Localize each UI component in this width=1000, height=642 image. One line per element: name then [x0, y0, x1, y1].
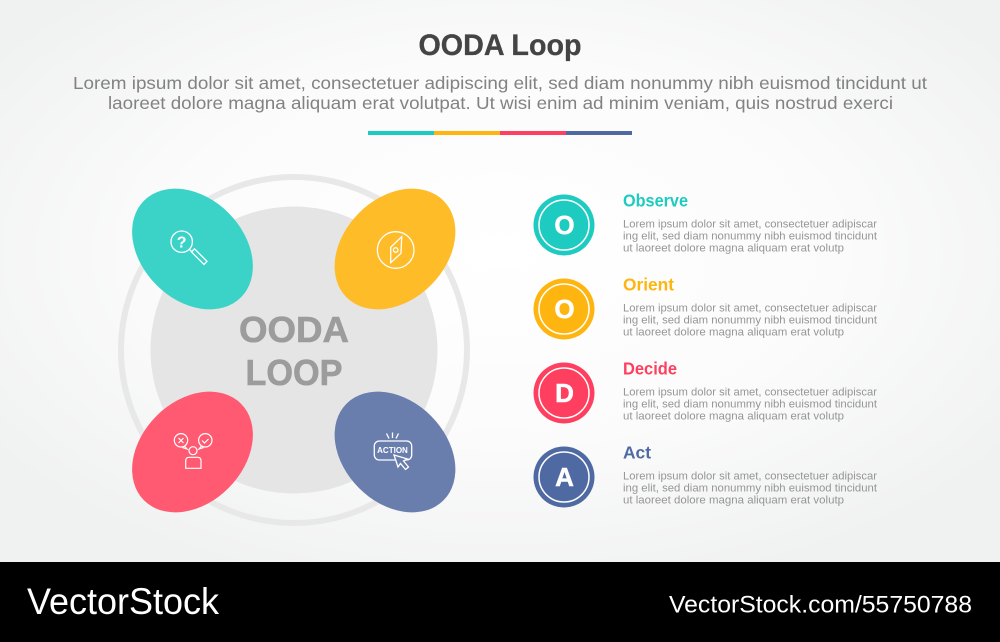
cycle diagram [108, 165, 479, 536]
petal: observe [108, 165, 277, 333]
badge O: O [554, 210, 575, 240]
body text: ut laoreet dolore magna aliquam erat volutp [623, 410, 844, 422]
body text [623, 386, 877, 422]
badge D: D [555, 378, 574, 408]
icon: magnifying glass with question mark: ? [177, 234, 187, 252]
petal: orient [311, 165, 479, 333]
body text: Lorem ipsum dolor sit amet, consectetuer adipiscar [623, 302, 877, 314]
body text [623, 470, 877, 506]
body text: ing elit, sed diam nonummy nibh euismod tincidunt [623, 482, 877, 494]
colour divider bar [368, 131, 632, 135]
centre label: OODA [239, 309, 349, 350]
body text: ing elit, sed diam nonummy nibh euismod tincidunt [623, 398, 877, 410]
outer ring [121, 177, 467, 523]
badge D [534, 362, 594, 424]
title: OODA Loop [418, 29, 582, 62]
centre label: LOOP [246, 352, 342, 393]
list item: act [534, 442, 877, 508]
heading: Act [623, 442, 651, 462]
body text: ing elit, sed diam nonummy nibh euismod tincidunt [623, 314, 877, 326]
badge O [534, 194, 594, 256]
icon: action button with cursor: ACTION [377, 446, 408, 455]
list item: orient [534, 274, 877, 340]
list item: decide [534, 358, 877, 424]
body text: ut laoreet dolore magna aliquam erat volutp [623, 494, 844, 506]
footer logo: VectorStock [27, 581, 219, 622]
heading: Decide [623, 358, 677, 378]
badge A [534, 446, 594, 508]
centre label [239, 309, 349, 393]
icon: magnifying glass with question mark [171, 231, 207, 264]
body text: ut laoreet dolore magna aliquam erat volutp [623, 326, 844, 338]
body text [623, 218, 877, 254]
heading: Orient [623, 274, 674, 294]
heading: Observe [623, 190, 688, 210]
icon: compass [377, 232, 414, 268]
petal: decide [108, 368, 277, 536]
body text: ing elit, sed diam nonummy nibh euismod tincidunt [623, 230, 877, 242]
subtitle text block: Lorem ipsum dolor sit amet, consectetuer adipiscing elit, sed diam nonummy nibh euismod tincidunt ut [73, 73, 927, 93]
body text: Lorem ipsum dolor sit amet, consectetuer adipiscar [623, 386, 877, 398]
badge O [534, 278, 594, 340]
badge A: A [555, 462, 574, 492]
footer band [0, 562, 1000, 642]
subtitle text block: laoreet dolore magna aliquam erat volutpat. Ut wisi enim ad minim veniam, quis nostrud exerci [108, 93, 893, 113]
petal: act [311, 368, 479, 536]
body text [623, 302, 877, 338]
subtitle text block [73, 73, 927, 113]
centre disc [150, 206, 438, 494]
icon: person choosing [174, 434, 212, 468]
list item: observe [534, 190, 877, 256]
body text: Lorem ipsum dolor sit amet, consectetuer adipiscar [623, 218, 877, 230]
badge O: O [554, 294, 575, 324]
icon: action button with cursor [374, 432, 412, 470]
footer image id: VectorStock.com/55750788 [669, 592, 972, 618]
body text: Lorem ipsum dolor sit amet, consectetuer adipiscar [623, 470, 877, 482]
body text: ut laoreet dolore magna aliquam erat volutp [623, 242, 844, 254]
